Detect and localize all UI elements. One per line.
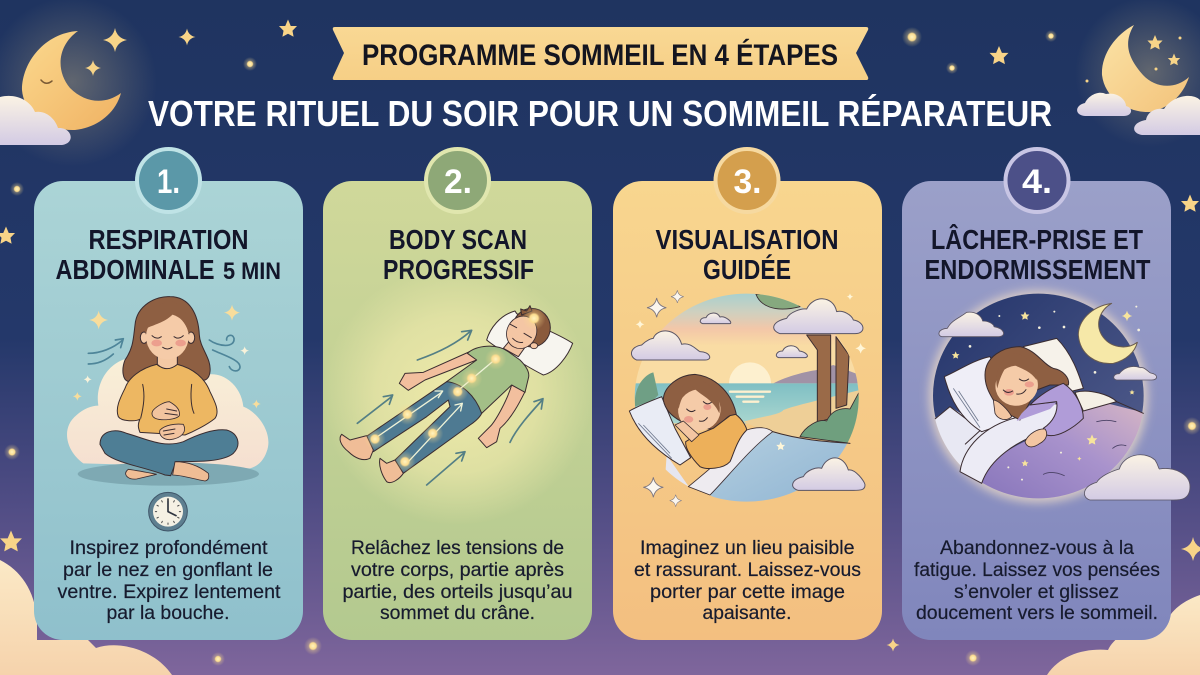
panel: step 2 body scan: [322, 147, 592, 640]
heading step 1 line 2: ABDOMINALE: [56, 254, 214, 285]
heading step 2: BODY SCAN: [389, 224, 527, 255]
description step 3: apaisante.: [702, 602, 792, 624]
illustration: woman breathing, cross-legged: [67, 297, 268, 531]
heading step 4: LÂCHER-PRISE ET: [931, 224, 1143, 255]
main title: VOTRE RITUEL DU SOIR POUR UN SOMMEIL RÉPARATEUR: [148, 93, 1052, 134]
description step 3: porter par cette image: [650, 581, 845, 603]
number badge 1: 1.: [157, 163, 180, 201]
heading step 1 line 2: 5 MIN: [223, 258, 281, 285]
number badge 2: [424, 147, 491, 214]
description step 4: Abandonnez-vous à la: [940, 537, 1134, 559]
description step 3: Imaginez un lieu paisible: [640, 537, 854, 559]
panel: step 4 letting go: [902, 147, 1190, 640]
illustration: man lying with scan points: [340, 306, 573, 485]
description step 1: par la bouche.: [106, 602, 230, 624]
number badge 1: [135, 147, 202, 214]
illustration: woman asleep in bed under moon: [929, 291, 1190, 505]
heading step 1: RESPIRATION: [88, 224, 248, 255]
bottom right cloud: [1047, 595, 1200, 675]
description step 2: sommet du crâne.: [380, 602, 535, 624]
icon: clock: [149, 492, 187, 531]
bottom left cloud: [0, 560, 172, 675]
moon and clouds, top right: [1075, 0, 1200, 147]
illustration: sleeping woman, seaside sunset scene: [629, 290, 866, 507]
heading step 4 line 2: ENDORMISSEMENT: [924, 254, 1151, 285]
description step 2: Relâchez les tensions de: [351, 537, 564, 559]
panel: step 3 visualisation: [613, 147, 882, 640]
heading step 3 line 2: GUIDÉE: [703, 254, 791, 285]
number badge 3: 3.: [734, 163, 762, 201]
description step 2: votre corps, partie après: [351, 559, 564, 581]
description step 4: s’envoler et glissez: [954, 581, 1119, 603]
description step 1: [58, 537, 281, 624]
description step 3: [634, 537, 861, 624]
description step 2: [342, 537, 572, 624]
description step 1: Inspirez profondément: [70, 537, 268, 559]
description step 1: par le nez en gonflant le: [63, 559, 273, 581]
heading step 2 line 2: PROGRESSIF: [383, 254, 534, 285]
banner: programme title ribbon: [333, 27, 868, 80]
number badge 3: [714, 147, 780, 214]
description step 3: et rassurant. Laissez-vous: [634, 559, 861, 581]
number badge 4: [1004, 147, 1070, 214]
description step 4: doucement vers le sommeil.: [916, 602, 1158, 624]
number badge 2: 2.: [444, 163, 472, 201]
description step 1: ventre. Expirez lentement: [58, 581, 281, 603]
heading step 3: VISUALISATION: [656, 224, 838, 255]
number badge 4: 4.: [1022, 163, 1052, 201]
description step 4: [914, 537, 1160, 624]
description step 4: fatigue. Laissez vos pensées: [914, 559, 1160, 581]
panel: step 1 respiration: [34, 147, 303, 640]
moon and cloud, top left: [0, 0, 157, 167]
description step 2: partie, des orteils jusqu’au: [342, 581, 572, 603]
banner: programme title ribbon: PROGRAMME SOMMEIL EN 4 ÉTAPES: [362, 38, 838, 72]
